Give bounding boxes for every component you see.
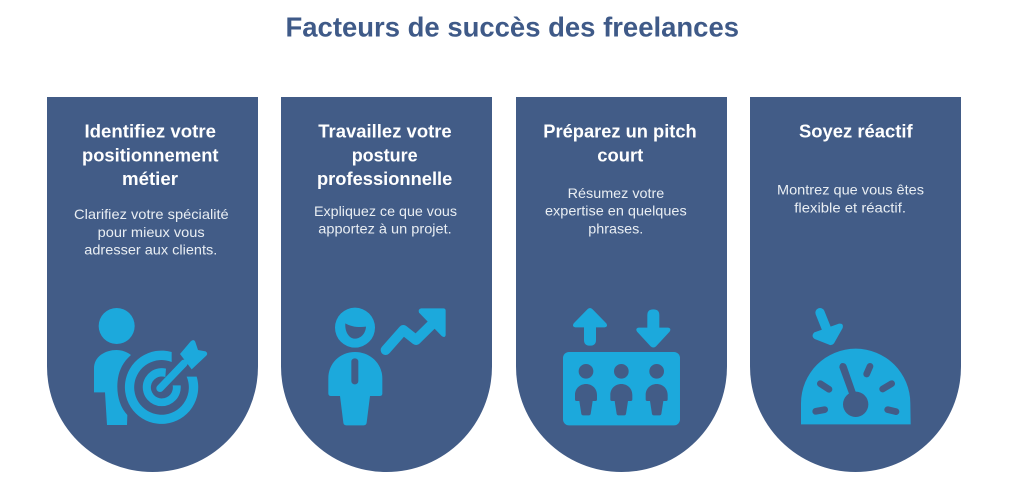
body text 3: expertise en quelques — [545, 203, 687, 219]
body text 4: Montrez que vous êtes — [777, 182, 924, 198]
heading 2: Travaillez votre — [318, 122, 452, 142]
icon: person with target — [94, 308, 207, 425]
body text 3: phrases. — [588, 220, 643, 236]
heading 3: Préparez un pitch — [543, 122, 697, 142]
heading 2: professionnelle — [317, 169, 452, 189]
body text 4 — [777, 182, 924, 215]
body text 3 — [545, 185, 687, 236]
heading 3 — [543, 122, 697, 165]
body text 1 — [74, 206, 229, 257]
heading 2 — [317, 122, 452, 189]
title: Facteurs de succès des freelances — [286, 12, 739, 42]
heading 1: Identifiez votre — [84, 122, 216, 142]
panel: pitch court — [516, 97, 727, 472]
card shape 3 — [516, 97, 727, 472]
card shape 4 — [750, 97, 961, 472]
body text 4: flexible et réactif. — [794, 199, 906, 215]
heading 3: court — [597, 145, 643, 165]
heading 4: Soyez réactif — [799, 122, 914, 142]
card shape 2 — [281, 97, 492, 472]
icon: audience with up and down arrows — [563, 308, 680, 425]
body text 1: adresser aux clients. — [84, 241, 217, 257]
body text 1: pour mieux vous — [98, 224, 205, 240]
panel: positionnement métier — [47, 97, 258, 472]
body text 2: apportez à un projet. — [318, 220, 452, 236]
card shape 1 — [47, 97, 258, 472]
panel: réactivité — [750, 97, 961, 472]
body text 2 — [314, 203, 457, 236]
heading 1: métier — [122, 169, 178, 189]
heading 1 — [82, 122, 219, 189]
body text 1: Clarifiez votre spécialité — [74, 206, 229, 222]
heading 2: posture — [352, 145, 418, 165]
panel: posture professionnelle — [281, 97, 492, 472]
body text 2: Expliquez ce que vous — [314, 203, 457, 219]
icon: smiling person with rising arrow — [328, 308, 446, 425]
heading 1: positionnement — [82, 145, 219, 165]
body text 3: Résumez votre — [568, 185, 665, 201]
icon: speedometer with arrow — [801, 313, 911, 424]
